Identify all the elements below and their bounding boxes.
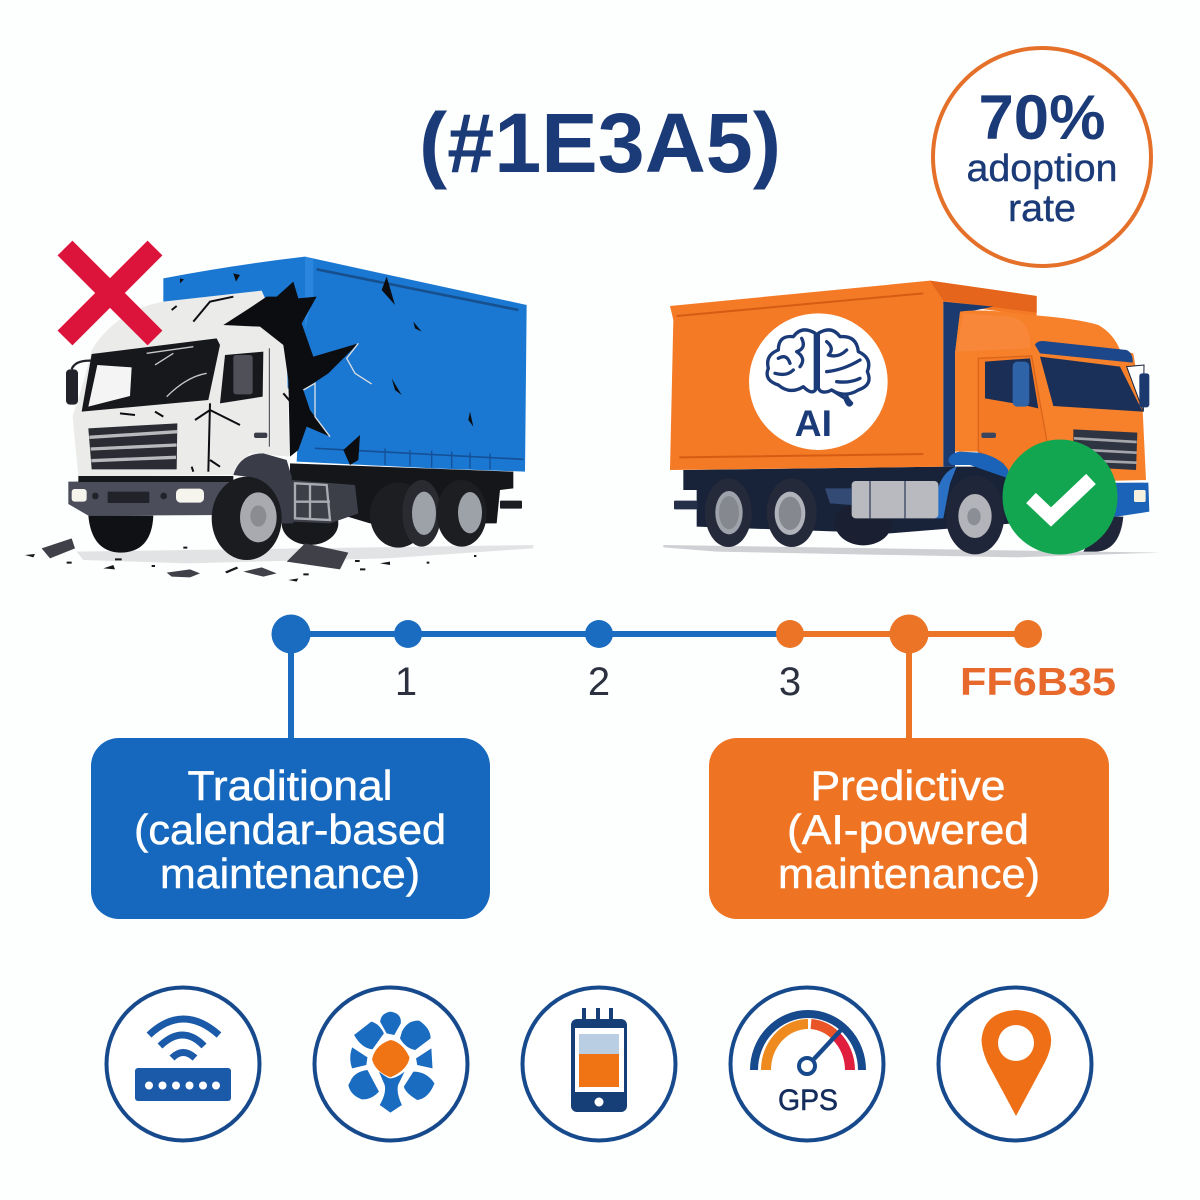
timeline: 2 [588,660,610,704]
rear wheels [282,480,487,548]
debris [42,538,348,577]
timeline [272,614,1116,740]
illustration: AI predictive orange truck [663,281,1160,557]
timeline: 3 [779,660,801,704]
chassis [290,463,513,523]
panel: predictive maintenance: (AI-powered [787,806,1029,853]
icon: GPS speedometer [730,988,884,1140]
grille [1073,429,1137,470]
grille [88,423,177,469]
visor and windshield [1035,341,1149,412]
panel: traditional maintenance: (calendar-based [134,806,446,853]
icon: location pin [938,988,1092,1140]
wheel arch [233,453,293,523]
callout: 70% adoption rate: 70% [978,83,1106,153]
icon: GPS speedometer: GPS [778,1084,838,1117]
damage: torn hole [223,282,358,457]
fuel tanks [825,481,938,545]
icon: brain [767,330,869,405]
AI label: AI [795,402,832,444]
title: (#1E3A5) [419,96,781,190]
icon: wifi router [106,988,260,1140]
chassis [683,467,1013,533]
cargo box, blue [163,257,527,472]
panel: predictive maintenance [709,738,1109,919]
cargo box, orange [670,281,1037,470]
icon: mobile device [522,988,676,1140]
timeline: 1 [395,660,417,704]
callout: 70% adoption rate: rate [1008,188,1076,230]
timeline: FF6B35 [960,661,1116,704]
panel: traditional maintenance: Traditional [188,762,392,809]
panel: traditional maintenance: maintenance) [160,850,420,897]
front wheels [88,477,282,560]
wheels [705,476,1123,554]
icon: green check [1002,440,1118,554]
cab, orange [955,311,1146,483]
door window and mirror [66,348,269,447]
door window [985,358,1038,408]
icon: red X [65,248,155,338]
panel: predictive maintenance: Predictive [810,762,1006,809]
bumper [68,481,230,516]
cab, white [73,291,289,477]
damage: cracks [120,297,303,472]
callout: 70% adoption rate [933,48,1151,266]
icon: sensor network [314,988,468,1140]
callout: 70% adoption rate: adoption [966,148,1118,190]
panel: traditional maintenance [91,738,490,919]
illustration: damaged blue truck [25,257,533,582]
panel: predictive maintenance: maintenance) [778,850,1040,897]
windshield [82,338,220,412]
cab rear panel [943,302,993,467]
bumper [1017,483,1149,517]
AI badge [749,313,888,450]
fuel tank [292,480,358,523]
